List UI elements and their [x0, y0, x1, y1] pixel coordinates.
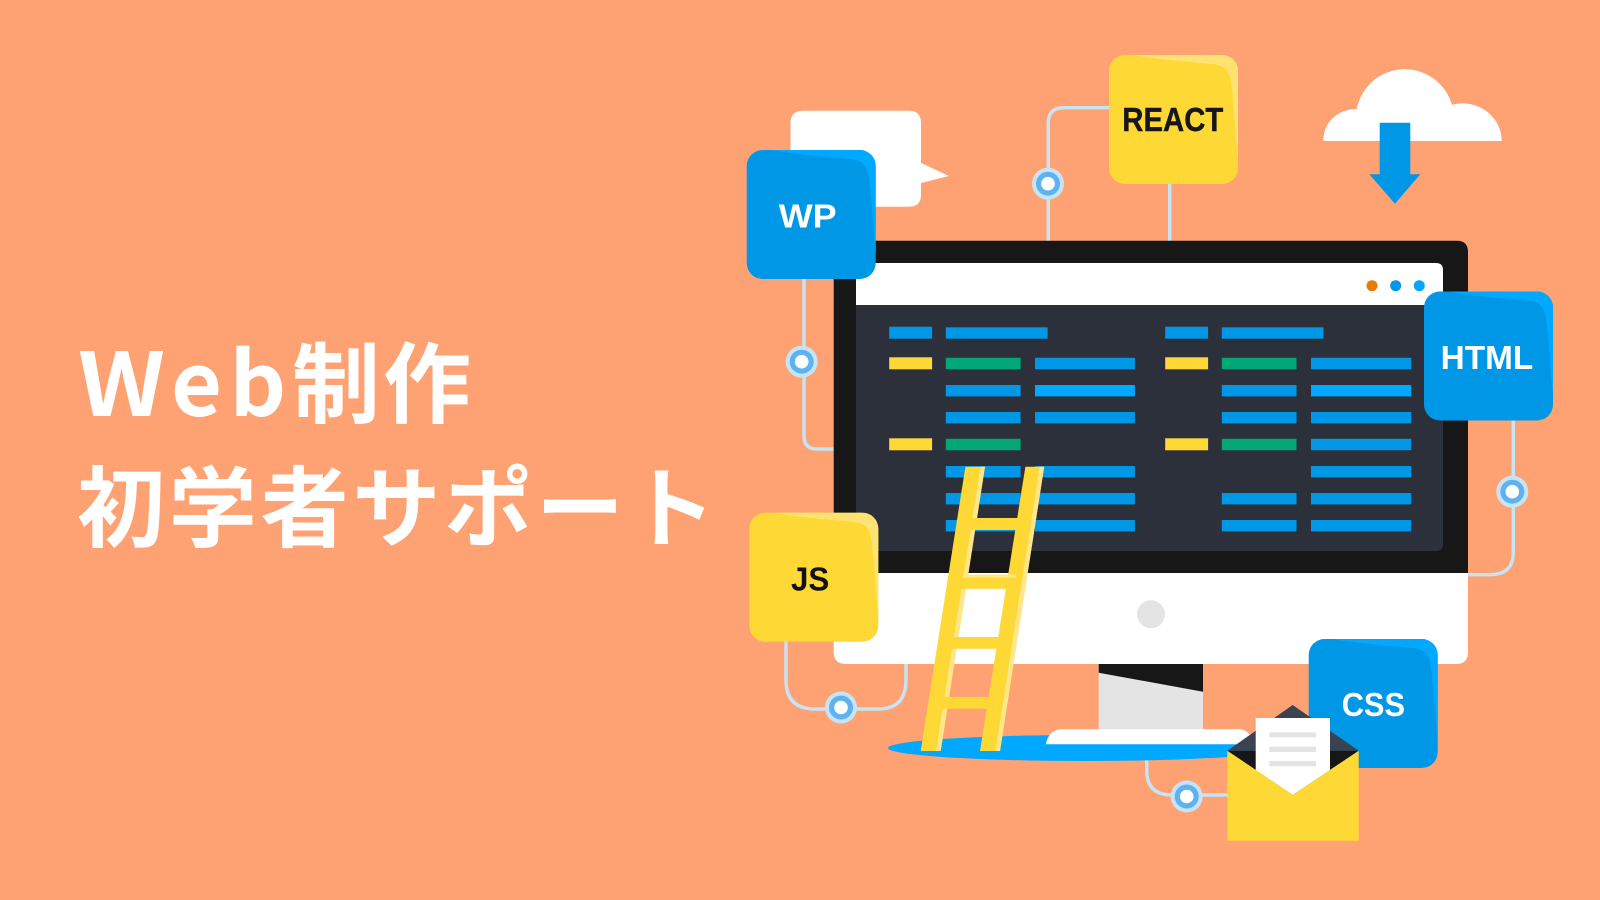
monitor chin	[834, 573, 1468, 664]
connector lines	[786, 108, 1513, 795]
title: 初学者サポート	[77, 439, 720, 566]
power button	[1137, 600, 1165, 628]
node: js	[825, 692, 857, 724]
badge: HTML	[1424, 292, 1553, 420]
blue floor ellipse	[888, 735, 1282, 761]
browser title bar	[856, 263, 1443, 305]
cloud download icon	[1323, 69, 1502, 204]
letter	[1256, 718, 1330, 795]
monitor base	[1046, 729, 1254, 744]
title	[77, 315, 720, 566]
node: react	[1032, 168, 1064, 200]
monitor bezel	[834, 241, 1468, 573]
node: html	[1496, 476, 1528, 508]
badge: CSS	[1309, 639, 1438, 768]
title: eb制作	[171, 315, 471, 442]
badge: JS: JS	[791, 561, 829, 598]
ladder	[921, 467, 1044, 751]
code screen	[856, 305, 1443, 551]
badge: WP	[747, 150, 876, 279]
badge: CSS: CSS	[1342, 686, 1405, 723]
speech bubble	[790, 111, 949, 207]
badge: REACT: REACT	[1122, 101, 1223, 138]
code bars	[889, 327, 1411, 531]
monitor stand	[1099, 660, 1203, 732]
node: envelope	[1171, 780, 1203, 812]
badge: HTML: HTML	[1441, 339, 1533, 376]
badge: REACT	[1109, 55, 1238, 184]
monitor	[834, 241, 1468, 732]
envelope icon	[1227, 705, 1359, 841]
badge: JS	[749, 513, 878, 642]
browser dots	[1366, 280, 1425, 291]
node: wp	[786, 346, 818, 378]
badge: WP: WP	[779, 197, 837, 234]
title: W	[78, 315, 165, 442]
